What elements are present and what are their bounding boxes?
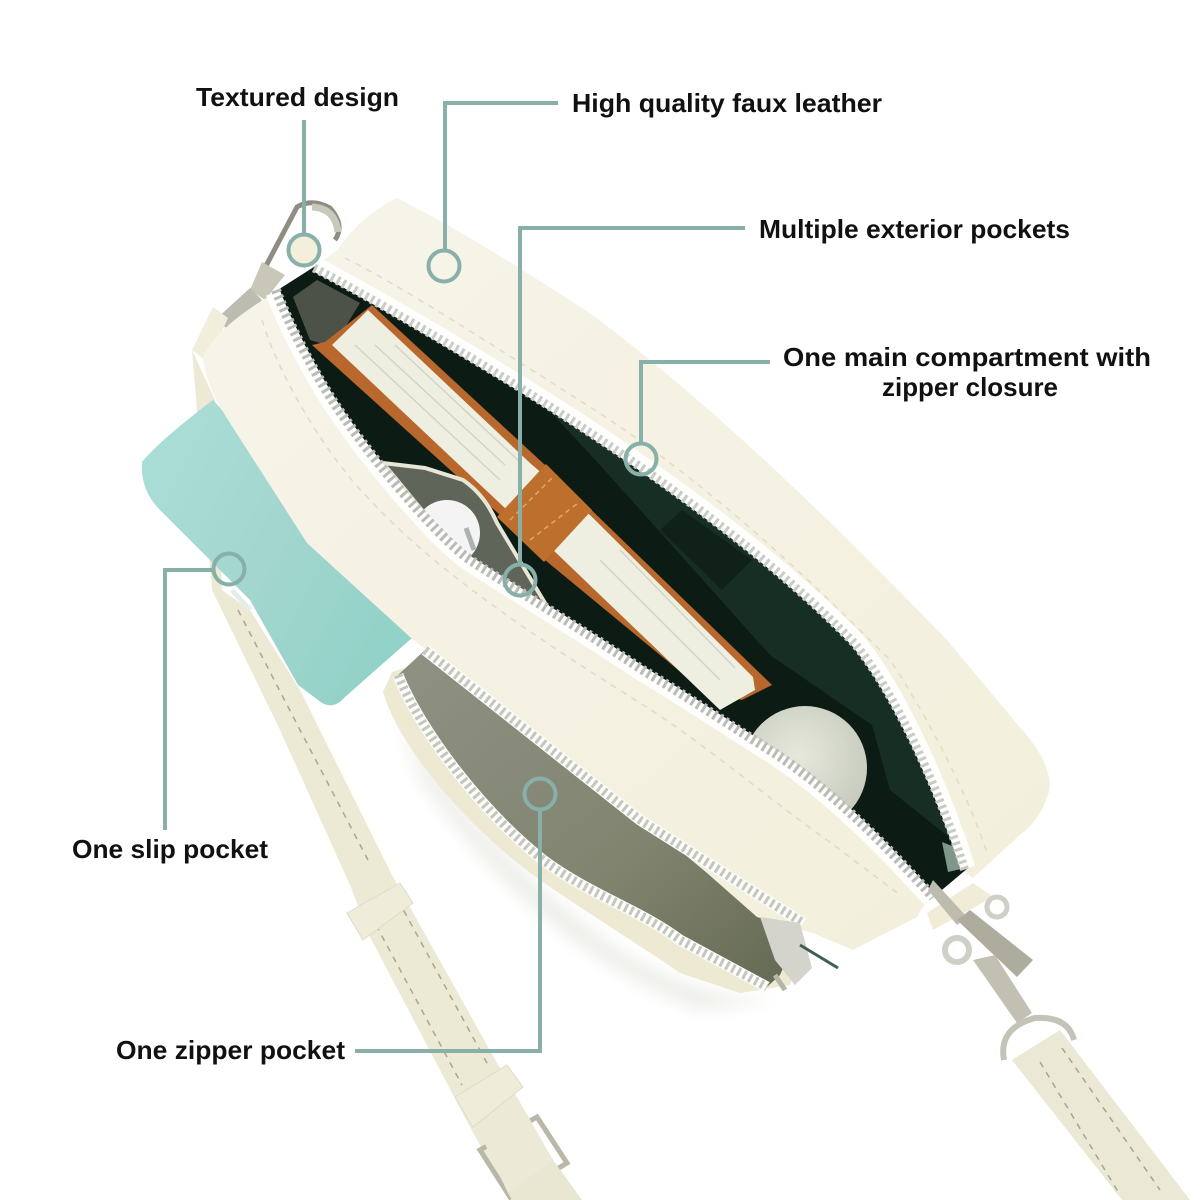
label: main compartment: One main compartment with xyxy=(783,342,1151,372)
green lining spot xyxy=(942,842,965,872)
strap clip ring xyxy=(1003,1018,1074,1060)
front pocket outer xyxy=(383,660,800,993)
tablet strap and loop xyxy=(660,510,752,590)
book page lines xyxy=(355,345,735,680)
pouch snap xyxy=(232,590,250,610)
label: faux leather: High quality faux leather xyxy=(572,88,882,118)
callout: exterior pockets xyxy=(504,228,745,596)
shoulder strap xyxy=(192,350,1190,1200)
strap right end xyxy=(1012,1030,1190,1200)
strap buckle xyxy=(480,1117,567,1197)
pocket zipper upper xyxy=(425,650,803,923)
front panel stitching xyxy=(262,320,900,895)
label: zipper pocket: One zipper pocket xyxy=(116,1035,345,1065)
pocket zipper lower xyxy=(398,675,767,987)
front pocket lining xyxy=(398,650,803,987)
back panel of bag xyxy=(317,198,1050,878)
callout: main compartment xyxy=(626,362,770,474)
front panel xyxy=(203,293,930,950)
callout: slip pocket xyxy=(165,554,244,830)
strap keeper lower xyxy=(455,1065,523,1127)
mint slip pouch xyxy=(142,400,412,705)
label: slip pocket: One slip pocket xyxy=(72,834,268,864)
brown wallet xyxy=(312,305,772,700)
main zipper pull xyxy=(927,880,1033,1023)
interior green lining xyxy=(530,390,950,838)
label: main compartment xyxy=(783,342,1151,402)
callout: faux leather xyxy=(428,103,558,282)
pocket zipper pull xyxy=(760,917,838,990)
interior dark compartment xyxy=(273,265,968,900)
main zipper lower xyxy=(273,290,933,900)
inner pocket xyxy=(383,463,557,623)
label: main compartment: zipper closure xyxy=(882,372,1058,402)
callout: textured design xyxy=(288,120,320,266)
brown strap on book xyxy=(497,464,592,562)
strap keeper upper xyxy=(347,883,413,940)
top-left hardware xyxy=(192,203,339,362)
silver ball xyxy=(414,500,480,566)
white ball in main compartment xyxy=(743,706,867,830)
book pages xyxy=(332,310,755,710)
label: textured design: Textured design xyxy=(196,82,399,112)
back panel stitching xyxy=(345,258,987,853)
label: exterior pockets: Multiple exterior pockets xyxy=(759,214,1070,244)
pocket soft shadow xyxy=(400,720,780,1010)
grey lining top xyxy=(293,280,360,347)
callout: zipper pocket xyxy=(355,778,556,1051)
main zipper upper xyxy=(314,265,968,871)
